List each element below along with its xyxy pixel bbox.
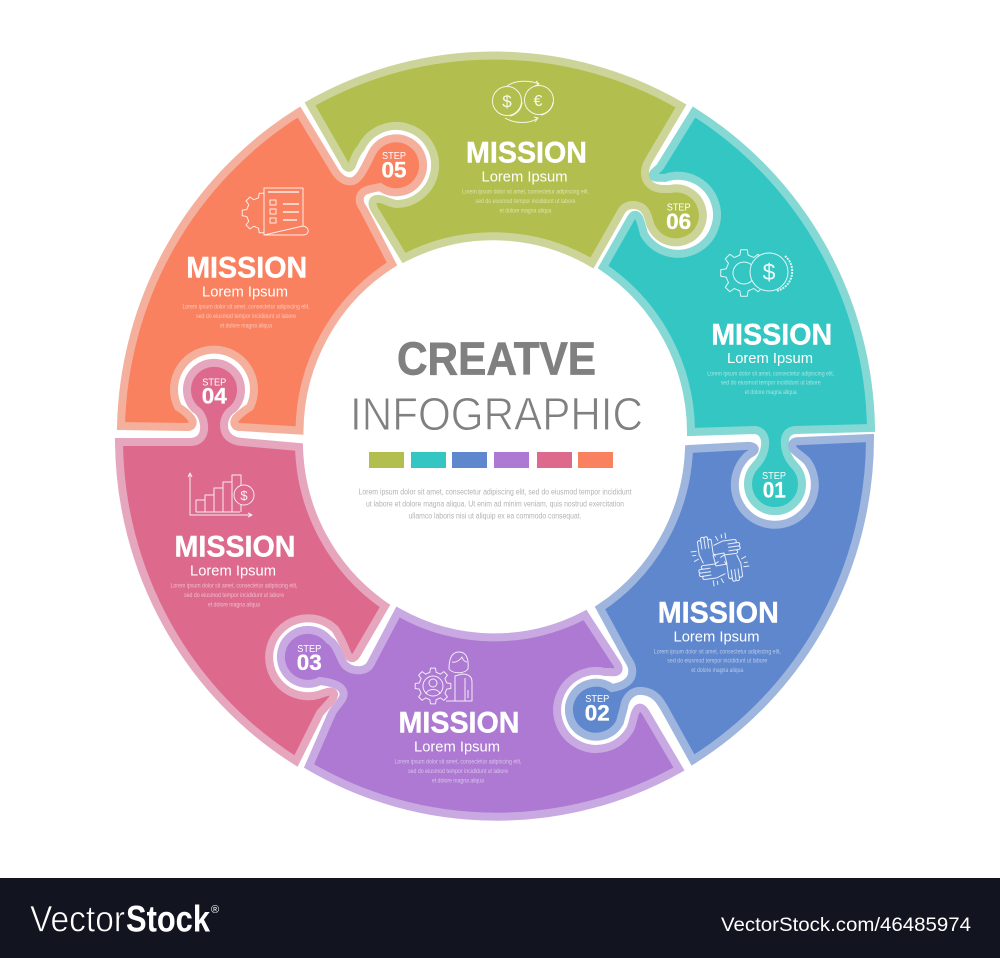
body text: et dolore magna aliqua	[220, 323, 273, 329]
body text: Lorem ipsum dolor sit amet, consectetur adipiscing elit,	[394, 760, 522, 766]
step badge 03: 03	[297, 650, 322, 675]
icon: gear and checklist	[242, 188, 308, 235]
step badge 05: 05	[382, 158, 406, 183]
step badge 04: STEP	[202, 377, 227, 388]
step badge 01: STEP	[762, 471, 786, 482]
body text: Lorem ipsum dolor sit amet, consectetur adipiscing elit,	[462, 190, 589, 196]
center description	[358, 488, 632, 520]
panel: mission blue	[569, 438, 870, 760]
icon: gear and person	[415, 652, 472, 704]
icon: currency exchange coins	[492, 81, 554, 122]
footer logo: Stock	[126, 898, 210, 940]
subheading: Lorem Ipsum	[727, 350, 813, 367]
heading: MISSION	[398, 707, 520, 740]
center description: ullamco laboris nisi ut aliquip ex ea commodo consequat.	[408, 512, 582, 520]
center description: Lorem ipsum dolor sit amet, consectetur adipiscing elit, sed do eiusmod tempor incididunt	[358, 488, 632, 496]
panel: mission pink	[119, 363, 385, 761]
footer bar	[0, 878, 1000, 958]
colour swatches	[369, 452, 613, 468]
body text: sed do eiusmod tempor incididunt ut labore	[476, 199, 576, 205]
step badge 02: STEP	[585, 694, 610, 705]
panel: mission orange	[121, 112, 423, 430]
footer logo: Vector	[30, 898, 125, 940]
panel: mission olive	[310, 56, 703, 263]
step badge 01: 01	[763, 478, 786, 503]
body text	[462, 190, 589, 214]
body text	[654, 649, 781, 674]
icon: bar chart with coin	[188, 473, 254, 517]
body text: sed do eiusmod tempor incididunt ut labore	[408, 769, 509, 775]
body text: et dolore magna aliqua	[691, 668, 744, 674]
subheading: Lorem Ipsum	[414, 739, 500, 756]
icon: gear and coin	[721, 250, 792, 296]
footer logo: ®	[211, 904, 219, 916]
body text: Lorem ipsum dolor sit amet, consectetur adipiscing elit,	[182, 305, 310, 311]
body text	[394, 760, 522, 784]
body text: et dolore magna aliqua	[745, 390, 797, 396]
panel: mission purple	[281, 612, 679, 817]
center title: CREATVE	[397, 332, 596, 384]
step badge 06: STEP	[667, 203, 691, 214]
heading: MISSION	[186, 252, 307, 285]
center title	[350, 332, 643, 440]
icon: four joined hands	[689, 531, 751, 588]
heading: MISSION	[711, 318, 832, 351]
body text: sed do eiusmod tempor incididunt ut labore	[196, 314, 297, 320]
heading: MISSION	[658, 596, 779, 629]
subheading: Lorem Ipsum	[674, 628, 760, 645]
icon: currency exchange coins: $	[502, 92, 512, 111]
body text: et dolore magna aliqua	[500, 208, 552, 214]
step badge 06: 06	[666, 209, 691, 234]
step badge 02: 02	[585, 701, 610, 726]
footer logo	[30, 898, 219, 940]
icon: bar chart with coin: $	[240, 488, 248, 503]
body text	[707, 371, 834, 396]
center title: INFOGRAPHIC	[350, 388, 643, 440]
step badge 04: 04	[202, 383, 228, 408]
subheading: Lorem Ipsum	[202, 284, 288, 301]
body text	[170, 584, 298, 608]
icon: gear and coin: $	[763, 259, 776, 285]
body text: sed do eiusmod tempor incididunt ut labore	[667, 659, 768, 665]
subheading: Lorem Ipsum	[482, 169, 568, 186]
step badge 05: STEP	[382, 151, 406, 162]
body text: sed do eiusmod tempor incididunt ut labore	[721, 381, 821, 387]
body text: Lorem ipsum dolor sit amet, consectetur adipiscing elit,	[707, 371, 834, 377]
panel: mission teal	[603, 112, 871, 511]
body text: sed do eiusmod tempor incididunt ut labore	[184, 593, 285, 599]
step badge 03: STEP	[297, 644, 322, 655]
body text: et dolore magna aliqua	[208, 602, 261, 608]
heading: MISSION	[174, 531, 296, 564]
center description: ut labore et dolore magna aliqua. Ut enim ad minim veniam, quis nostrud exercitation	[366, 500, 624, 508]
body text: et dolore magna aliqua	[432, 778, 485, 784]
subheading: Lorem Ipsum	[190, 563, 276, 580]
body text	[182, 305, 310, 329]
body text: Lorem ipsum dolor sit amet, consectetur adipiscing elit,	[654, 649, 781, 655]
footer image id: VectorStock.com/46485974	[721, 915, 971, 936]
body text: Lorem ipsum dolor sit amet, consectetur adipiscing elit,	[170, 584, 298, 590]
icon: currency exchange coins: €	[534, 93, 543, 110]
heading: MISSION	[466, 137, 587, 170]
